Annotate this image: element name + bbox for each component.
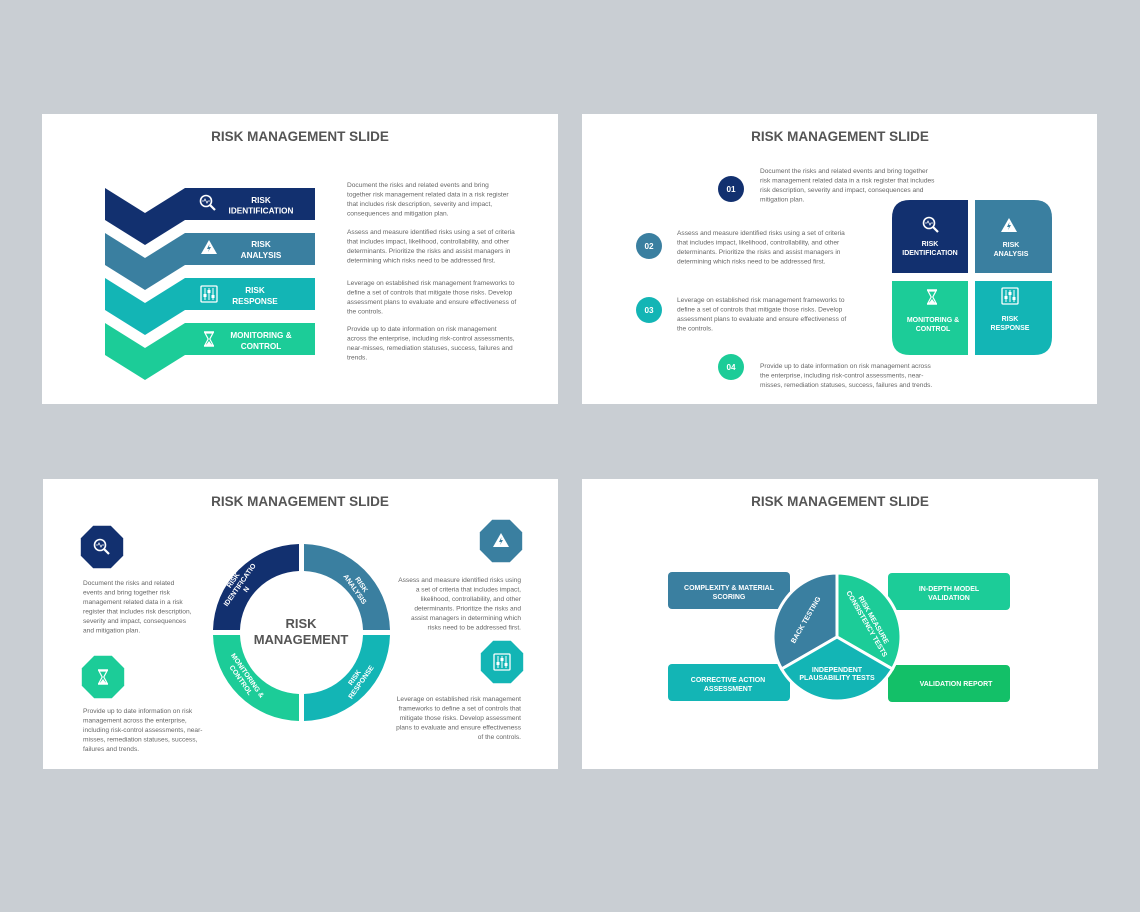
step 02: determining which risks need to be addressed first.: [677, 258, 826, 266]
step 02: determinants. Prioritize the risks and assist managers in: [677, 249, 841, 256]
text: monitoring: Provide up to date information on risk: [83, 708, 193, 715]
ring chart: CONTROL: [228, 664, 254, 697]
text: identification: severity and impact, consequences: [83, 618, 187, 625]
chevron: monitoring & control: [105, 323, 315, 380]
step 04: the enterprise, including risk-control assessments, near-: [760, 372, 923, 380]
step 01: risk description, severity and impact, consequences and: [760, 187, 924, 194]
text block: descriptions: that includes risk description, severity and impact,: [347, 201, 492, 208]
icon: analysis octagon: [480, 520, 522, 562]
box: complexity & material scoring: SCORING: [713, 594, 746, 601]
text: identification: [83, 580, 192, 634]
grid tile: risk analysis: RISK: [1003, 242, 1019, 249]
grid tile: risk identification: IDENTIFICATION: [902, 250, 958, 257]
text: response: plans to evaluate and ensure effectiveness: [396, 724, 522, 732]
pie labels: RISK MEASURE: [857, 595, 890, 646]
step 04: [718, 354, 932, 389]
step 01: [718, 168, 935, 204]
box: in-depth model validation: VALIDATION: [928, 595, 970, 602]
text block: descriptions: consequences and mitigation plan.: [347, 210, 449, 218]
ring chart: IDENTIFICATIO: [223, 562, 258, 608]
box: complexity & material scoring: COMPLEXITY & MATERIAL: [684, 585, 775, 592]
ring chart: N: [243, 586, 251, 594]
text block: descriptions: Leverage on established risk management frameworks to: [347, 280, 515, 287]
panel: chevron process slide: [42, 114, 558, 404]
grid tile: risk identification: RISK: [922, 241, 938, 248]
text: analysis: Assess and measure identified risks using: [398, 577, 521, 584]
grid tile: monitoring & control: [892, 281, 968, 355]
text block: descriptions: trends.: [347, 354, 367, 362]
step 03: Leverage on established risk management frameworks to: [677, 297, 845, 304]
box: validation report: VALIDATION REPORT: [920, 681, 993, 688]
text: identification: management related data in a risk: [83, 599, 183, 606]
text: monitoring: including risk-control assessments, near-: [83, 727, 202, 734]
box: in-depth model validation: IN-DEPTH MODEL: [919, 586, 980, 593]
text block: descriptions: Assess and measure identified risks using a set of criteria: [347, 229, 515, 236]
box: corrective action assessment: CORRECTIVE ACTION: [691, 677, 765, 684]
box: corrective action assessment: ASSESSMENT: [704, 686, 753, 693]
text: response: of the controls.: [478, 734, 521, 741]
text block: descriptions: assessment plans to evaluate and ensure effectiveness of: [347, 299, 516, 306]
text block: descriptions: the controls.: [347, 308, 383, 316]
grid tile: risk response: RESPONSE: [991, 325, 1030, 332]
text: response: [396, 696, 522, 741]
ring chart: RISK: [347, 669, 363, 687]
chevron: monitoring & control: CONTROL: [241, 342, 281, 351]
text: monitoring: management across the enterprise,: [83, 718, 187, 724]
step 03: 03: [644, 306, 654, 315]
box: in-depth model validation: [888, 573, 1010, 610]
icon: identification octagon: [81, 526, 123, 568]
title: RISK MANAGEMENT SLIDE: [211, 494, 389, 509]
grid tile: monitoring & control: MONITORING &: [907, 317, 959, 324]
text: analysis: [398, 577, 522, 632]
step 01: 01: [726, 185, 736, 194]
ring chart: ANALYSIS: [341, 573, 367, 606]
text block: descriptions: [347, 182, 516, 362]
text block: descriptions: together risk management related data in a risk register: [347, 192, 509, 198]
text: response: frameworks to define a set of controls that: [399, 706, 521, 712]
grid tile: risk analysis: [975, 200, 1052, 273]
chevron: risk response: [105, 278, 315, 335]
ring chart: RESPONSE: [348, 664, 376, 701]
ring chart: MANAGEMENT: [254, 632, 348, 647]
chevron: risk identification: [105, 188, 315, 245]
ring chart: RISK: [226, 572, 242, 590]
step 03: the controls.: [677, 326, 713, 332]
text block: descriptions: determining which risks need to be addressed first.: [347, 258, 496, 264]
title: RISK MANAGEMENT SLIDE: [751, 494, 929, 509]
pie labels: PLAUSABILITY TESTS: [799, 675, 875, 682]
text: identification: events and bring together risk: [83, 590, 171, 596]
pie labels: CONSISTENCY TESTS: [844, 590, 888, 659]
center label: RISK: [285, 616, 317, 631]
text: response: Leverage on established risk management: [397, 696, 521, 703]
text: analysis: risks need to be addressed first.: [428, 624, 521, 632]
chevron: risk response: RISK: [245, 286, 265, 295]
ring chart: RISK: [353, 576, 369, 594]
icon: response octagon: [481, 641, 523, 683]
text block: descriptions: that includes impact, likelihood, controllability, and other: [347, 238, 510, 246]
text block: descriptions: define a set of controls that mitigate those risks. Develop: [347, 290, 513, 296]
pie labels: [790, 586, 895, 682]
step 04: misses, remediation statuses, success, failures and trends.: [760, 382, 932, 389]
text: analysis: a set of criteria that includes impact,: [416, 586, 521, 594]
pie chart: [773, 573, 901, 701]
text: monitoring: [83, 708, 202, 753]
text: analysis: likelihood, controllability, and other: [421, 596, 522, 603]
text block: descriptions: near-misses, remediation statuses, success, failures and: [347, 345, 513, 352]
step 01: risk management related data in a risk register that includes: [760, 178, 935, 184]
step 01: Document the risks and related events and bring together: [760, 168, 929, 175]
grid tile: monitoring & control: CONTROL: [916, 326, 951, 333]
panel: numbered grid slide: [582, 114, 1097, 404]
step 03: define a set of controls that mitigate those risks. Develop: [677, 306, 843, 314]
pie labels: INDEPENDENT: [812, 667, 863, 674]
icon: monitoring octagon: [82, 656, 124, 698]
ring chart: MONITORING &: [229, 653, 265, 699]
text block: descriptions: Document the risks and related events and bring: [347, 182, 489, 189]
chevron: risk identification: RISK: [251, 196, 271, 205]
step 03: [636, 297, 846, 332]
text: identification: Document the risks and related: [83, 580, 175, 587]
box: validation report: [888, 665, 1010, 702]
step 02: that includes impact, likelihood, controllability, and other: [677, 240, 840, 246]
text: analysis: assist managers in determining which: [411, 615, 521, 622]
text block: descriptions: determinants. Prioritize the risks and assist managers in: [347, 248, 511, 255]
step 03: assessment plans to evaluate and ensure effectiveness of: [677, 316, 846, 323]
chevron: risk response: RESPONSE: [232, 297, 278, 306]
title: RISK MANAGEMENT SLIDE: [751, 129, 929, 144]
grid tile: risk response: [975, 281, 1052, 355]
step 04: Provide up to date information on risk management across: [760, 363, 931, 370]
chevron: monitoring & control: MONITORING &: [230, 331, 292, 340]
box: corrective action assessment: [668, 664, 790, 701]
text: monitoring: misses, remediation statuses, success,: [83, 736, 198, 744]
grid tile: risk analysis: ANALYSIS: [994, 251, 1029, 258]
step 02: 02: [644, 242, 654, 251]
panel: validation pie slide: [582, 479, 1098, 769]
text block: descriptions: across the enterprise, including risk-control assessments,: [347, 336, 515, 342]
text: identification: and mitigation plan.: [83, 628, 140, 634]
step 04: 04: [726, 363, 736, 372]
step 02: [636, 230, 845, 266]
step 02: Assess and measure identified risks using a set of criteria: [677, 230, 845, 237]
chevron: risk analysis: [105, 233, 315, 290]
chevron: risk analysis: RISK: [251, 240, 271, 249]
text block: descriptions: Provide up to date information on risk management: [347, 326, 497, 333]
grid tile: risk response: RISK: [1002, 316, 1018, 323]
text: response: mitigate those risks. Develop assessment: [400, 715, 521, 722]
pie labels: BACK TESTING: [790, 595, 823, 645]
panel: ring cycle slide: [43, 479, 558, 769]
chevron: risk identification: IDENTIFICATION: [229, 206, 294, 216]
chevron: risk analysis: ANALYSIS: [241, 251, 282, 260]
text: monitoring: failures and trends.: [83, 746, 139, 753]
step 01: mitigation plan.: [760, 196, 805, 204]
text: analysis: determinants. Prioritize the risks and: [414, 606, 521, 612]
box: complexity & material scoring: [668, 572, 790, 609]
title: RISK MANAGEMENT SLIDE: [211, 129, 389, 144]
text: identification: register that includes risk description,: [83, 608, 192, 616]
ring chart: [213, 544, 390, 721]
grid tile: risk identification: [892, 200, 968, 273]
